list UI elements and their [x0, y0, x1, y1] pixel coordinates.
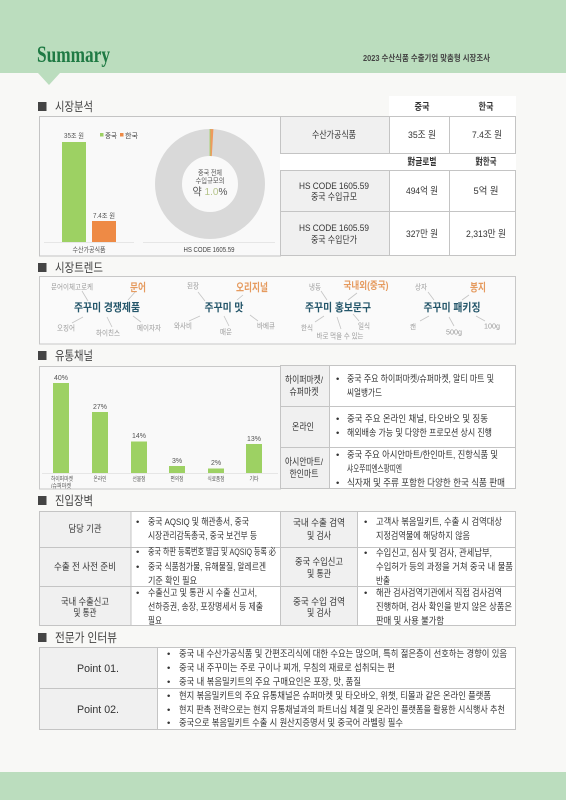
table: market size: 35조 원 — [408, 130, 436, 141]
section heading: market analysis: 시장분석 — [55, 100, 93, 114]
point 02 — [77, 690, 505, 729]
bar chart: distribution channels: 선물점 — [132, 475, 146, 483]
keyword group: promotion — [301, 279, 388, 340]
bar chart: distribution channels: 40% — [54, 375, 68, 382]
keyword group: promotion: 일식 — [358, 322, 370, 330]
point 02: • — [167, 718, 170, 729]
panel: market charts — [40, 116, 280, 256]
keyword group: promotion: 주꾸미 홍보문구 — [305, 300, 371, 314]
table: channel descriptions: 식자재 및 주류 포함한 다양한 한국 식품 판매 — [347, 477, 505, 489]
table: channel descriptions: 한인마트 — [290, 469, 319, 480]
table: entry barriers: 중국 AQSIQ 및 해관총서, 중국 — [148, 516, 249, 528]
keyword group: promotion: 바로 먹을 수 있는 — [316, 330, 364, 340]
table: entry barriers: 중국 수입신고 — [295, 556, 343, 568]
table: market size: 2,313만 원 — [466, 229, 506, 240]
table: entry barriers: 수출 전 사전 준비 — [54, 562, 116, 573]
bar chart: processed seafood: 중국 — [105, 132, 118, 140]
bar chart: processed seafood — [44, 131, 139, 254]
table: market size: 對글로벌 — [408, 156, 436, 168]
table: market size: 327만 원 — [406, 229, 438, 240]
point 02: 현지 볶음밀키트의 주요 유통채널은 슈퍼마켓 및 타오바오, 위챗, 티몰과 같은 온라인 플랫폼 — [179, 690, 491, 702]
table: entry barriers: 수입허가 등의 과정을 거쳐 중국 내 물품 — [376, 561, 513, 573]
table: entry barriers: 선하증권, 송장, 포장명세서 등 제출 — [148, 601, 263, 613]
bar chart: processed seafood: 수산가공식품 — [72, 245, 106, 254]
table: channel descriptions: • — [336, 374, 339, 385]
table: entry barriers: 반출 — [376, 576, 390, 587]
table: entry barriers: 및 검사 — [307, 530, 331, 542]
donut chart: import share: 약 1.0% — [192, 186, 228, 198]
point 01: • — [167, 663, 170, 674]
table: channel descriptions: • — [336, 414, 339, 425]
keyword group: competing products: 문어이체고로케 — [51, 282, 93, 292]
donut chart: import share: 중국 전체 — [198, 168, 222, 177]
keyword group: packaging: 주꾸미 패키징 — [424, 300, 480, 314]
bar chart: distribution channels: 14% — [132, 433, 146, 440]
report name: 2023 수산식품 수출기업 맞춤형 시장조사 — [363, 53, 490, 63]
table: market size: 중국 — [414, 102, 430, 113]
point 01: 중국 내 주꾸미는 주로 구이나 찌개, 무침의 재료로 섭취되는 편 — [179, 662, 395, 674]
section heading: distribution channels: 유통채널 — [55, 349, 93, 363]
table: entry barriers: • — [364, 548, 367, 559]
point 02: • — [167, 705, 170, 716]
keyword group: flavor: 와사비 — [174, 320, 192, 330]
table: channel descriptions: 아시안마트/ — [285, 457, 323, 468]
keyword group: competing products: 문어 — [130, 281, 146, 294]
table: entry barriers: 및 검사 — [307, 607, 331, 619]
keyword group: flavor: 오리지널 — [236, 281, 268, 294]
table: channel descriptions: 중국 주요 온라인 채널, 타오바오 및 징동 — [347, 413, 488, 425]
table: channel descriptions: 샤오쭈띠엔스팡띠엔 — [347, 464, 402, 475]
table: channel descriptions: • — [336, 428, 339, 439]
point 01 — [77, 648, 507, 688]
table: entry barriers: 지정검역물에 해당하지 않음 — [376, 530, 470, 542]
table: entry barriers: 중국 하판 등록번호 발급 및 AQSIQ 등록 必 — [148, 546, 276, 558]
table: market size: 한국 — [478, 101, 494, 113]
keyword group: promotion: 냉동 — [309, 282, 321, 292]
table: channel descriptions: 온라인 — [292, 422, 314, 433]
bar chart: distribution channels — [40, 366, 280, 490]
point 02: • — [167, 691, 170, 702]
bar chart: distribution channels: 편의점 — [170, 475, 184, 483]
table: market size: 중국 수입단가 — [311, 234, 357, 246]
table: channel descriptions: 중국 주요 아시안마트/한인마트, 진항식품 및 — [347, 449, 498, 461]
table: entry barriers: 수출신고 및 통관 시 수출 신고서, — [148, 587, 257, 599]
section heading: entry barriers — [38, 494, 93, 508]
table: entry barriers: • — [136, 547, 139, 558]
donut chart: import share — [143, 129, 275, 254]
bar chart: distribution channels: 온라인 — [94, 475, 106, 483]
table: entry barriers: 시장관리감독총국, 중국 보건부 등 — [148, 530, 257, 542]
bar chart: distribution channels: 13% — [247, 436, 261, 443]
bar chart: distribution channels: 하이퍼마켓 — [51, 475, 73, 483]
section heading: expert interview: 전문가 인터뷰 — [55, 631, 117, 645]
section heading: entry barriers: 진입장벽 — [55, 494, 93, 508]
keyword group: competing products: 메이자자 — [137, 322, 161, 332]
keyword group: flavor — [174, 280, 275, 336]
bar chart: processed seafood: 7.4조 원 — [93, 211, 115, 220]
bar chart: processed seafood: 35조 원 — [64, 131, 84, 140]
table: channel descriptions — [280, 365, 516, 489]
keyword group: competing products: 오징어 — [57, 322, 75, 332]
footer band — [0, 772, 566, 800]
section heading: market trends: 시장트렌드 — [55, 261, 103, 275]
table: entry barriers: 수입신고, 심사 및 검사, 관세납부, — [376, 547, 492, 559]
point 01: • — [167, 677, 170, 688]
point 01: 중국 내 수산가공식품 및 간편조리식에 대한 수요는 많으며, 특히 젊은층이 선호하는 경향이 있음 — [179, 648, 507, 660]
section heading: distribution channels — [38, 349, 93, 363]
donut chart: import share: HS CODE 1605.59 — [184, 247, 235, 254]
header band — [0, 0, 566, 85]
keyword group: packaging: 상자 — [415, 282, 427, 292]
table: entry barriers: • — [364, 588, 367, 599]
table: channel descriptions: 씨얼뱅가드 — [347, 388, 382, 399]
table: entry barriers: 및 통관 — [307, 568, 331, 580]
table: entry barriers: 고객사 볶음밀키트, 수출 시 검역대상 — [376, 516, 502, 528]
table: entry barriers: 중국 식품첨가물, 유해물질, 알레르겐 — [148, 561, 266, 573]
keyword group: competing products — [51, 281, 161, 338]
panel: keyword trends — [40, 276, 516, 344]
table: entry barriers: 기준 확인 필요 — [148, 575, 197, 587]
keyword group: flavor: 된장 — [187, 280, 199, 290]
keyword group: flavor: 매운 — [220, 328, 232, 336]
table: entry barriers: 국내 수출 검역 — [293, 517, 345, 529]
keyword group: promotion: 한식 — [301, 324, 313, 332]
table: expert interview — [39, 647, 516, 730]
table: entry barriers: 판매 및 사용 불가함 — [376, 615, 444, 627]
table: entry barriers: 국내 수출신고 — [61, 597, 109, 608]
table: channel descriptions: 하이퍼마켓/ — [285, 374, 323, 386]
title: Summary — [37, 42, 110, 67]
table: market size: 중국 수입규모 — [311, 191, 357, 203]
keyword group: competing products: 주꾸미 경쟁제품 — [74, 300, 140, 314]
table: entry barriers: • — [136, 588, 139, 599]
point 01: Point 01. — [77, 663, 119, 675]
keyword group: packaging: 봉지 — [470, 281, 486, 294]
point 02: Point 02. — [77, 704, 119, 716]
keyword group: packaging — [410, 281, 500, 336]
table: market size: 494억 원 — [406, 185, 438, 197]
table: channel descriptions: • — [336, 478, 339, 489]
table: entry barriers: • — [136, 517, 139, 528]
table: entry barriers: 필요 — [148, 615, 162, 627]
table: market size: 7.4조 원 — [472, 130, 502, 141]
table: channel descriptions: 중국 주요 하이퍼마켓/슈퍼마켓, 알티 마트 및 — [347, 373, 494, 385]
bar chart: distribution channels: 2% — [211, 460, 221, 467]
point 01: • — [167, 649, 170, 660]
section heading: market analysis — [38, 100, 93, 114]
table: entry barriers: 진행하며, 검사 확인을 받지 않은 상품은 — [376, 601, 512, 613]
keyword group: packaging: 캔 — [410, 322, 416, 332]
bar chart: distribution channels: /슈퍼마켓 — [51, 482, 71, 490]
table: market size: 5억 원 — [474, 185, 498, 197]
bar chart: distribution channels: 식료품점 — [208, 475, 224, 483]
table: market size: HS CODE 1605.59 — [299, 223, 369, 234]
keyword group: competing products: 하이친스 — [96, 328, 120, 338]
table: market size: 수산가공식품 — [312, 130, 356, 141]
point 02: 중국으로 볶음밀키트 수출 시 원산지증명서 및 중국어 라벨링 필수 — [179, 717, 403, 729]
keyword group: packaging: 100g — [484, 322, 500, 330]
table: market size: HS CODE 1605.59 — [299, 181, 369, 192]
section heading: expert interview — [38, 631, 117, 645]
donut chart: import share: 수입규모의 — [196, 176, 224, 185]
bar chart: distribution channels: 27% — [93, 404, 107, 411]
table: market size — [280, 96, 516, 256]
point 02: 현지 판촉 전략으로는 현지 유통채널과의 파트너십 체결 및 온라인 플랫폼을 활용한 시식행사 추천 — [179, 704, 505, 716]
table: channel descriptions: • — [336, 450, 339, 461]
table: channel descriptions: 해외배송 가능 및 다양한 프로모션 상시 진행 — [347, 427, 492, 439]
table: entry barriers: 해관 검사검역기관에서 직접 검사검역 — [376, 587, 502, 599]
table: entry barriers: 및 통관 — [74, 607, 97, 619]
keyword group: promotion: 국내외(중국) — [344, 279, 388, 292]
table: entry barriers — [39, 511, 516, 627]
bar chart: distribution channels: 3% — [172, 458, 182, 465]
table: market size: 對한국 — [476, 156, 497, 168]
table: entry barriers: 담당 기관 — [68, 523, 102, 535]
bar chart: processed seafood: 한국 — [125, 132, 139, 140]
table: channel descriptions: 슈퍼마켓 — [290, 387, 319, 398]
keyword group: packaging: 500g — [446, 328, 462, 336]
section heading: market trends — [38, 261, 103, 275]
bar chart: distribution channels: 기타 — [250, 475, 259, 483]
keyword group: flavor: 주꾸미 맛 — [204, 301, 244, 314]
keyword group: flavor: 바베큐 — [257, 320, 275, 330]
table: entry barriers: • — [136, 562, 139, 573]
table: entry barriers: 중국 수입 검역 — [293, 596, 345, 608]
point 01: 중국 내 볶음밀키트의 주요 구매요인은 포장, 맛, 품질 — [179, 676, 361, 688]
table: entry barriers: • — [364, 517, 367, 528]
